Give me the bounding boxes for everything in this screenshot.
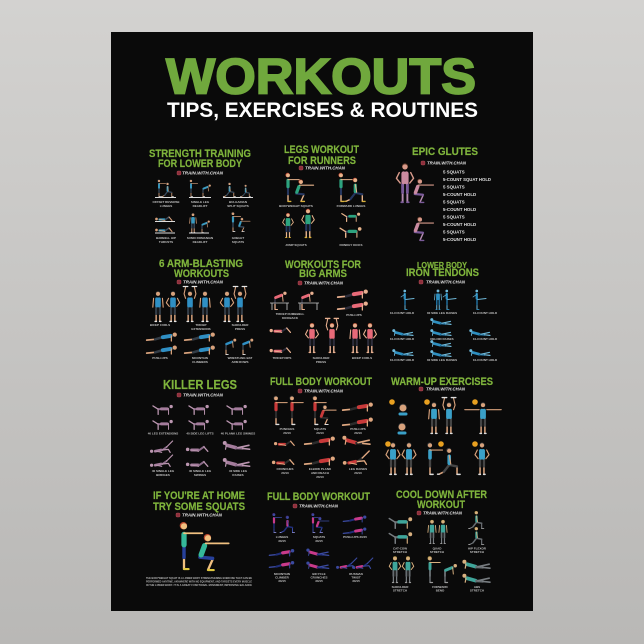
exercise: cat-cow stretch xyxy=(389,517,412,554)
exercise: push-ups xyxy=(343,402,373,435)
exercise: shoulder stretch: SHOULDER xyxy=(392,585,409,589)
exercise: elbow plank and reach: 20/10 xyxy=(316,475,324,479)
exercise: hip flexor stretch: HIP FLEXOR xyxy=(468,546,487,550)
credit: TRAIN.WITH.CHAN xyxy=(183,393,224,398)
exercise: bicep curls: BICEP CURLS xyxy=(352,356,372,360)
exercise: push-ups: PUSH-UPS 30/15 xyxy=(343,535,367,539)
panel: workouts for big arms xyxy=(270,259,376,364)
heading: FOR LOWER BODY xyxy=(158,158,242,170)
step 6: torso twist xyxy=(472,441,489,474)
step 3: arm circles xyxy=(465,399,501,433)
step 5: lunges xyxy=(427,441,460,474)
description text: THE BODYWEIGHT SQUAT IS A LOWER BODY STRENGTHENING EXERCISE THAT CAN BE xyxy=(146,576,252,580)
heading: EPIC GLUTES xyxy=(412,146,478,158)
exercise: sumo romanian deadlift: DEADLIFT xyxy=(193,240,208,244)
exercise: hip flexor stretch: STRETCH xyxy=(470,550,484,554)
step 4: hip circles xyxy=(385,441,416,474)
credit: TRAIN.WITH.CHAN xyxy=(305,166,346,171)
exercise: forward bend: BEND xyxy=(436,588,445,592)
routine list: 5-COUNT SQUAT HOLD xyxy=(443,177,491,182)
exercise: offset reverse lunges: OFFSET REVERSE xyxy=(152,200,180,204)
exercise: mountain climber: CLIMBER xyxy=(275,576,290,580)
exercise: punches: PUNCHES xyxy=(280,427,294,431)
panel: killer legs xyxy=(148,378,255,477)
exercise: goblet squats: SQUATS xyxy=(232,240,244,244)
panel: warm-up exercises xyxy=(385,376,501,474)
heading xyxy=(396,489,487,511)
heading xyxy=(153,490,245,513)
exercise: side leg raises: RAISES xyxy=(232,473,244,477)
heading xyxy=(285,259,361,280)
exercise: bulgarian split squats xyxy=(223,182,253,208)
exercise: crunches xyxy=(272,441,294,475)
description text: IN THE LOWER BODY. IT IS A GREAT FUNCTIONAL MOVEMENT, IMPROVING BALANCE xyxy=(146,583,252,587)
credit: TRAIN.WITH.CHAN xyxy=(182,171,224,176)
exercise: forward bend: FORWARD xyxy=(432,585,449,589)
exercise: sumo romanian deadlift: SUMO ROMANIAN xyxy=(187,236,213,240)
exercise: quad stretch xyxy=(428,520,447,554)
exercise: barbell hip thrusts: BARBELL HIP xyxy=(156,236,176,240)
credit: TRAIN.WITH.CHAN xyxy=(183,280,224,285)
exercise: shoulder press: PRESS xyxy=(235,327,245,331)
exercise: bulgarian split squats: BULGARIAN xyxy=(229,200,247,204)
exercise: standing hold left: 10-COUNT HOLD xyxy=(390,311,415,315)
description text: PERFORMED ANYTIME, ANYWHERE WITH NO EQUIPMENT, AND TARGETS EVERY MUSCLE xyxy=(146,580,252,584)
exercise: hip flexor stretch xyxy=(468,511,487,554)
exercise: squats: SQUATS xyxy=(314,427,326,431)
exercise: abs stretch xyxy=(462,560,490,592)
exercise: forward lunges: FORWARD LUNGES xyxy=(337,204,365,208)
exercise: leg hold left: 10-COUNT HOLD xyxy=(390,358,415,362)
exercise: abs stretch: STRETCH xyxy=(470,588,484,592)
credit: TRAIN.WITH.CHAN xyxy=(304,281,344,286)
heading: FULL BODY WORKOUT xyxy=(267,491,370,503)
exercise: russian twist xyxy=(336,558,373,583)
exercise: squats xyxy=(312,396,336,435)
description text xyxy=(146,576,252,587)
exercise: squats: 30/15 xyxy=(315,539,323,543)
exercise: leg hold right: 10-COUNT HOLD xyxy=(473,358,498,362)
exercise: side-lying hold right: 10-COUNT HOLD xyxy=(473,337,498,341)
exercise: bicycle crunches xyxy=(306,549,329,583)
exercise: elbow plank and reach: AND REACH xyxy=(311,471,329,475)
exercise: tricep dumbbell kickback xyxy=(270,292,319,320)
exercise: lunges: 30/15 xyxy=(278,539,286,543)
credit: TRAIN.WITH.CHAN xyxy=(182,513,223,518)
routine list: 5-COUNT HOLD xyxy=(443,192,476,197)
routine list: 5 SQUATS xyxy=(443,200,465,204)
exercise: mountain climbers xyxy=(185,332,215,364)
heading xyxy=(406,261,479,279)
exercise: single leg swings xyxy=(186,447,212,477)
exercise: russian twist: TWIST xyxy=(351,576,361,580)
routine list: 5 SQUATS xyxy=(443,184,465,190)
exercise: lunges: LUNGES xyxy=(276,535,288,539)
exercise: leg raises: LEG RAISES xyxy=(349,467,367,471)
heading: LOWER BODY xyxy=(417,261,468,270)
exercise: side leg raises xyxy=(223,441,250,477)
exercise: wrestling arm rows xyxy=(226,339,253,364)
subtitle: TIPS, EXERCISES & ROUTINES xyxy=(167,99,478,122)
exercise: single leg deadlift: DEADLIFT xyxy=(193,204,208,208)
exercise: side leg lifts: 40 SIDE LEG LIFTS xyxy=(186,432,214,436)
routine list: 5 SQUATS xyxy=(443,170,465,174)
exercise: shoulder press: SHOULDER xyxy=(313,356,330,360)
exercise: shoulder press: SHOULDER xyxy=(232,323,249,327)
exercise: forward bend xyxy=(428,556,457,592)
exercise: abs stretch: ABS xyxy=(474,585,480,589)
heading xyxy=(284,144,359,167)
exercise: cat-cow stretch: STRETCH xyxy=(393,550,407,554)
step 2: arm swings xyxy=(424,398,456,433)
exercise: quad stretch: STRETCH xyxy=(430,550,444,554)
exercise: crunches: 20/10 xyxy=(281,471,289,475)
heading: 6 ARM-BLASTING xyxy=(159,258,243,270)
exercise: wrestling arm rows: ARM ROWS xyxy=(232,360,248,364)
exercise: single leg swings: 40 SINGLE LEG xyxy=(189,469,212,473)
figure: standing xyxy=(396,163,414,202)
exercise: leg raises: 20/10 xyxy=(354,471,362,475)
exercise: lunges xyxy=(272,513,294,543)
exercise: leg raises xyxy=(342,436,370,475)
exercise: crunches: CRUNCHES xyxy=(276,467,294,471)
exercise: mountain climber xyxy=(269,549,294,583)
heading: TRY SOME SQUATS xyxy=(153,501,245,513)
panel: legs workout for runners xyxy=(279,144,365,247)
exercise: punches xyxy=(273,396,303,435)
exercise: side leg raises lying: 30 SIDE LEG RAISES xyxy=(427,358,457,362)
exercise: push-ups: PUSH-UPS xyxy=(346,313,362,317)
panel: if you're at home try some squats xyxy=(146,490,252,587)
exercise: jump squats: JUMP SQUATS xyxy=(285,243,307,247)
heading: WARM-UP EXERCISES xyxy=(391,376,493,388)
exercise: deltoid raises: DELOID RAISES xyxy=(430,337,454,341)
exercise: russian twist: 30/15 xyxy=(352,579,360,583)
exercise: single leg deadlift: SINGLE LEG xyxy=(191,200,210,204)
exercise: single leg deadlift xyxy=(189,179,211,208)
exercise: punches: 20/10 xyxy=(283,431,291,435)
exercise: elbow plank and reach: ELBOW PLANK xyxy=(309,467,332,471)
exercise: squats: SQUATS xyxy=(313,535,325,539)
routine list: 5 SQUATS xyxy=(443,230,465,234)
exercise: elbow plank and reach xyxy=(305,436,335,479)
panel: strength training for lower body xyxy=(149,148,253,244)
exercise: tricep dips: TRICEP DIPS xyxy=(273,356,291,360)
exercise: tricep dumbbell kickback: KICKBACK xyxy=(282,316,299,320)
exercise: bicep curls: BICEP CURLS xyxy=(150,323,170,327)
exercise: shoulder press xyxy=(220,286,249,331)
exercise: offset reverse lunges xyxy=(152,179,180,208)
exercise: mountain climber: 30/15 xyxy=(278,579,286,583)
exercise: mountain climber: MOUNTAIN xyxy=(274,572,290,576)
exercise: bodyweight squats: BODYWEIGHT SQUATS xyxy=(279,204,313,208)
exercise: shoulder stretch xyxy=(389,556,414,592)
exercise: bicycle crunches: BICYCLE xyxy=(312,572,326,576)
exercise: shoulder press: PRESS xyxy=(316,360,326,364)
step 1: neck rolls xyxy=(389,399,407,433)
routine list: 5-COUNT HOLD xyxy=(443,222,476,227)
exercise: single leg bridges: BRIDGES xyxy=(156,473,170,477)
heading: STRENGTH TRAINING xyxy=(149,148,251,160)
exercise: leg extensions: 40 LEG EXTENSIONS xyxy=(148,432,178,436)
heading: KILLER LEGS xyxy=(163,378,237,392)
exercise: tricep extensions: EXTENSIONS xyxy=(191,327,211,331)
exercise: shoulder stretch: STRETCH xyxy=(393,588,407,592)
exercise: sumo romanian deadlift xyxy=(187,213,213,244)
heading: COOL DOWN AFTER xyxy=(396,489,487,501)
exercise: side leg raises: 40 SIDE LEG xyxy=(229,469,248,473)
panel: lower body iron tendons xyxy=(390,261,498,362)
exercise: single leg swings: SWINGS xyxy=(194,473,206,477)
heading: WORKOUT xyxy=(417,499,465,511)
exercise: russian twist: RUSSIAN xyxy=(349,572,363,576)
credit: TRAIN.WITH.CHAN xyxy=(426,387,466,392)
exercise: bulgarian split squats: SPLIT SQUATS xyxy=(227,204,249,208)
poster panel xyxy=(111,32,533,611)
exercise: mountain climbers: MOUNTAIN xyxy=(192,356,208,360)
exercise: bicycle crunches: CRUNCHES xyxy=(310,576,328,580)
heading: BIG ARMS xyxy=(299,268,347,280)
exercise: goblet squats xyxy=(231,212,250,244)
exercise: offset reverse lunges: LUNGES xyxy=(160,204,172,208)
figure: second squat xyxy=(415,217,434,240)
credit: TRAIN.WITH.CHAN xyxy=(304,389,344,394)
exercise: squats: 20/10 xyxy=(316,431,324,435)
heading: FULL BODY WORKOUT xyxy=(270,376,372,388)
exercise: barbell hip thrusts: THRUSTS xyxy=(159,240,173,244)
exercise: side leg raises standing: 30 SIDE LEG RAISES xyxy=(427,311,457,315)
figure: standing xyxy=(180,522,202,569)
exercise: shoulder press xyxy=(306,318,338,364)
exercise: barbell hip thrusts xyxy=(155,217,176,244)
heading: WORKOUTS FOR xyxy=(285,259,361,271)
routine list: 5-COUNT HOLD xyxy=(443,207,476,212)
heading: IRON TENDONS xyxy=(406,267,479,279)
exercise: wrestling arm rows: WRESTLING BAT xyxy=(228,356,253,360)
exercise: standing hold right: 10-COUNT HOLD xyxy=(473,311,498,315)
routine list: 5 SQUATS xyxy=(443,214,465,220)
routine list: 5-COUNT HOLD xyxy=(443,237,476,242)
exercise: cat-cow stretch: CAT-COW xyxy=(393,546,407,550)
panel: cool down after workout xyxy=(389,489,490,592)
heading xyxy=(159,258,243,280)
panel: full body workout 30/15 xyxy=(267,491,373,583)
exercise: tricep extensions xyxy=(183,286,211,331)
exercise: push-ups: 20/10 xyxy=(354,431,362,435)
heading: LEGS WORKOUT xyxy=(284,144,359,156)
credit: TRAIN.WITH.CHAN xyxy=(427,161,467,166)
heading: WORKOUTS xyxy=(174,268,229,280)
exercise: push-ups: PUSH-UPS xyxy=(350,427,366,431)
exercise: mountain climbers: CLIMBERS xyxy=(192,360,208,364)
heading: FOR RUNNERS xyxy=(288,155,356,167)
exercise: tricep extensions: TRICEP xyxy=(195,323,207,327)
exercise: side-lying hold left: 10-COUNT HOLD xyxy=(390,337,415,341)
exercise: tricep dumbbell kickback: TRICEP DUMBBELL xyxy=(276,312,304,316)
exercise: single leg bridges: 40 SINGLE LEG xyxy=(152,469,175,473)
exercise: goblet squats: GOBLET xyxy=(232,236,244,240)
heading: IF YOU'RE AT HOME xyxy=(153,490,245,502)
credit: TRAIN.WITH.CHAN xyxy=(299,504,339,509)
exercise: quad stretch: QUAD xyxy=(433,546,442,550)
exercise: single leg bridges xyxy=(150,441,175,477)
figure: squat xyxy=(415,179,434,202)
exercise: bicycle crunches: 30/15 xyxy=(315,579,323,583)
exercise: push-ups: PUSH-UPS xyxy=(152,356,168,360)
exercise: squats xyxy=(311,513,329,543)
panel: full body workout xyxy=(270,376,373,479)
exercise: donkey kicks: DONKEY KICKS xyxy=(340,243,362,247)
exercise: plank leg swings: 40 PLANK LEG SWINGS xyxy=(221,432,255,436)
credit: TRAIN.WITH.CHAN xyxy=(426,280,466,285)
panel: 6 arm-blasting workouts xyxy=(147,258,253,364)
credit: TRAIN.WITH.CHAN xyxy=(423,511,463,516)
heading xyxy=(149,148,251,170)
routine list xyxy=(443,170,491,242)
figure: squat xyxy=(200,534,229,570)
panel: epic glutes xyxy=(396,146,491,242)
title: WORKOUTS xyxy=(166,48,476,104)
